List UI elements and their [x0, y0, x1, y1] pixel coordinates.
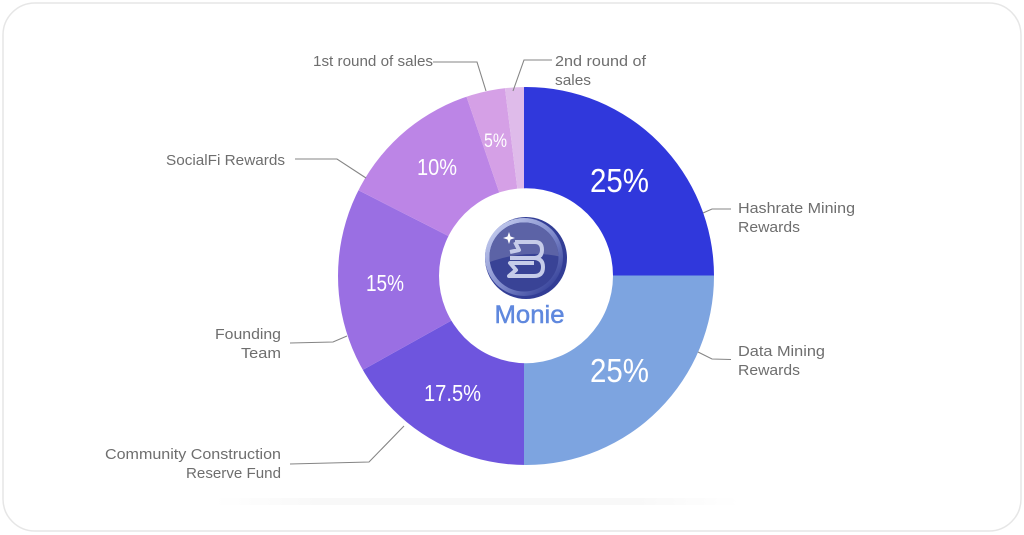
label: Data Mining Rewards: Data Mining	[738, 343, 825, 360]
label: Founding Team	[215, 326, 347, 362]
shadow beneath donut	[215, 498, 740, 505]
label: Community Construction Reserve Fund	[105, 426, 404, 482]
label: 1st round of sales	[313, 53, 486, 91]
label: Hashrate Mining Rewards: Rewards	[738, 219, 800, 236]
percentage: 17.5%: 17.5%	[424, 380, 481, 406]
label: 1st round of sales: 1st round of sales	[313, 53, 433, 70]
label: Community Construction Reserve Fund: Community Construction	[105, 446, 281, 463]
icon: Monie coin	[485, 217, 567, 299]
percentage: 15%: 15%	[366, 270, 404, 296]
label: SocialFi Rewards	[166, 152, 366, 178]
label: 2nd round of sales: 2nd round of	[555, 53, 647, 70]
percentage: 25% Hashrate: 25%	[590, 162, 649, 199]
donut chart	[338, 87, 714, 465]
label: Hashrate Mining Rewards: Hashrate Mining	[738, 200, 855, 217]
label: Hashrate Mining Rewards	[703, 200, 855, 236]
slice: 2nd round of sales	[505, 87, 524, 189]
percentage: 5%: 5%	[484, 131, 507, 152]
label: Community Construction Reserve Fund: Reserve Fund	[186, 465, 281, 482]
percentage: 10%: 10%	[417, 154, 457, 180]
label: Data Mining Rewards: Rewards	[738, 362, 800, 379]
label: Data Mining Rewards	[698, 343, 825, 379]
label: Founding Team: Team	[241, 345, 281, 362]
slice: Data Mining Rewards 25%	[524, 276, 714, 465]
label: 2nd round of sales: sales	[555, 72, 591, 89]
slice: 1st round of sales 5%	[466, 88, 518, 192]
label: Founding Team: Founding	[215, 326, 281, 343]
slice: Community Construction Reserve Fund 17.5%	[363, 320, 524, 465]
slice: Hashrate Mining Rewards 25%	[524, 87, 714, 276]
logo wordmark: Monie	[494, 301, 564, 329]
slice: SocialFi Rewards 10%	[358, 96, 500, 236]
label: 2nd round of sales	[513, 53, 647, 91]
label: SocialFi Rewards: SocialFi Rewards	[166, 152, 285, 169]
percentage: 25% Data: 25%	[590, 352, 649, 389]
slice: Founding Team 15%	[338, 190, 452, 370]
